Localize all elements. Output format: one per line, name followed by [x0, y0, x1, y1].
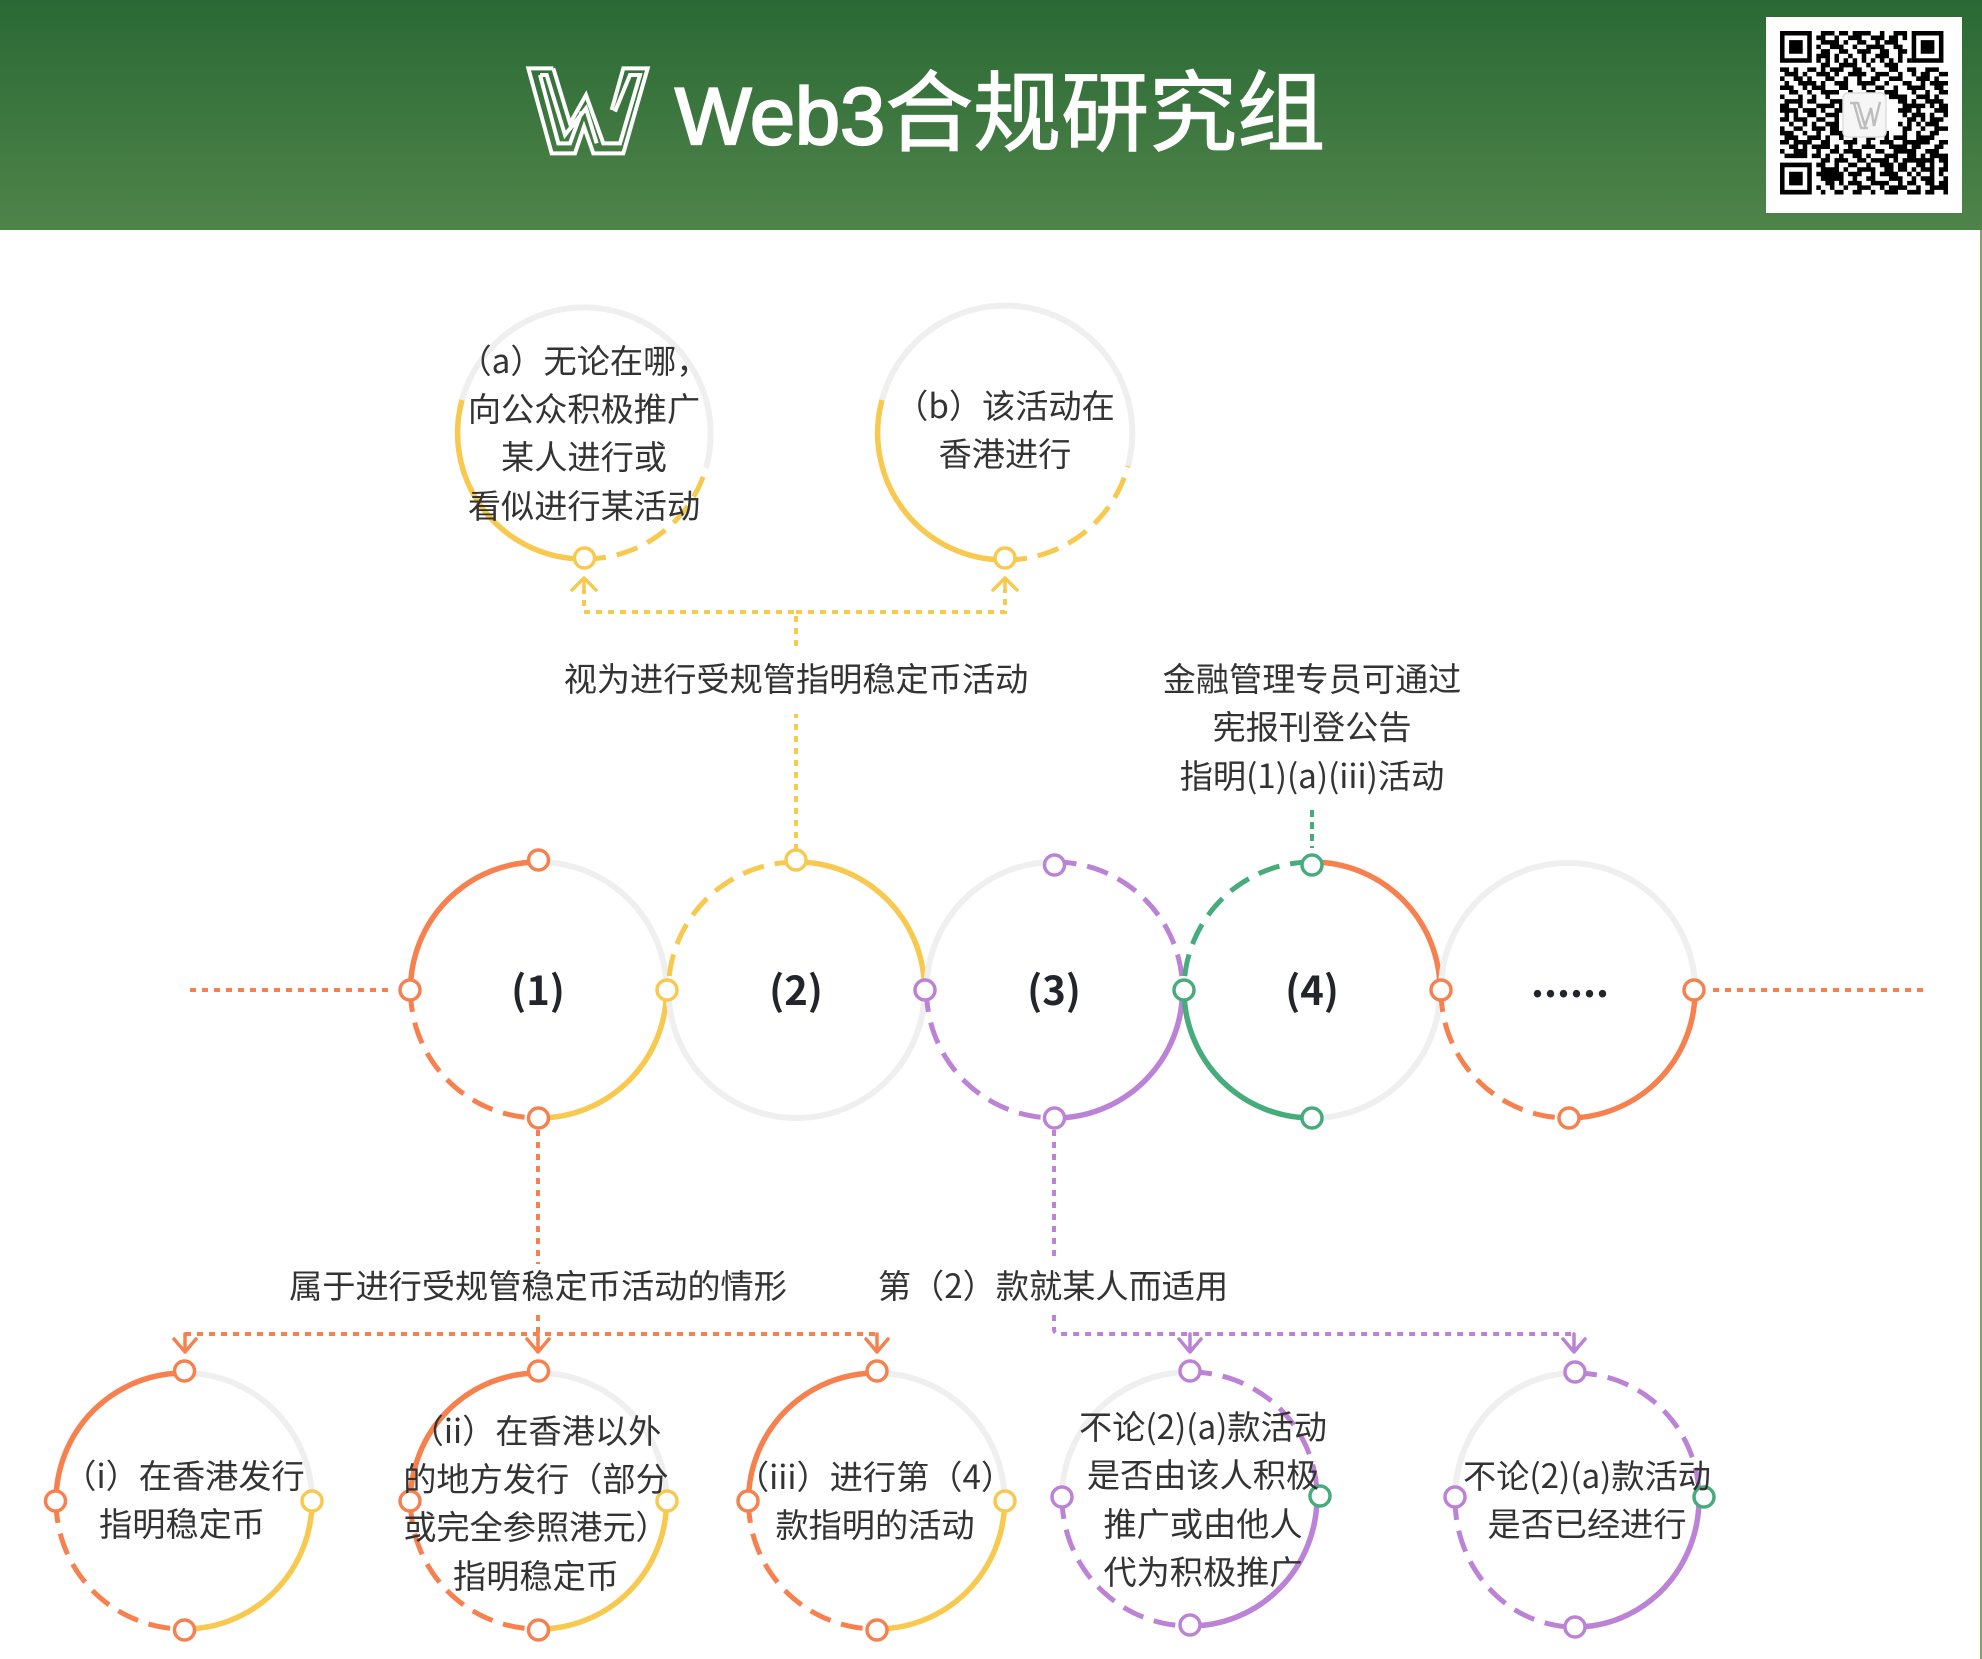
text: b: 香港进行: [939, 427, 1071, 476]
header banner: [0, 0, 1982, 230]
connector: green dashed: [1310, 810, 1314, 848]
connector: right dotted line: [1713, 988, 1929, 992]
icon: W logo: [528, 68, 648, 153]
bottom circle (iii): [736, 1361, 1015, 1640]
circle (3): (3): [1027, 959, 1081, 1017]
text: a: 向公众积极推广: [468, 382, 700, 431]
text: i: （i）在香港发行: [63, 1449, 305, 1498]
circle (5): [1441, 863, 1695, 1118]
bottom circle (v): [1445, 1362, 1714, 1637]
top circle (b): [878, 306, 1132, 568]
circle (4): (4): [1285, 959, 1339, 1017]
text: ii: 或完全参照港元）: [403, 1500, 669, 1549]
label: deemed activity: 视为进行受规管指明稳定币活动: [564, 652, 1028, 701]
QR code: [1766, 17, 1962, 213]
text: iv: 是否由该人积极: [1087, 1448, 1319, 1497]
circle (5): ......: [1531, 951, 1609, 1009]
bottom circle (ii): [400, 1361, 677, 1640]
circle (1): [410, 862, 666, 1118]
text: iv: 不论(2)(a)款活动: [1079, 1400, 1327, 1449]
circle (2): (2): [769, 959, 823, 1017]
text: ii: 的地方发行（部分: [403, 1452, 669, 1501]
connector: purple dotted down with arrows: [1054, 1130, 1585, 1352]
main circle row: [400, 850, 1704, 1128]
bottom circle (iv): [1052, 1361, 1330, 1635]
text: a: 看似进行某活动: [468, 479, 700, 528]
text: ii: （ii）在香港以外: [411, 1404, 661, 1453]
circle (4): [1184, 862, 1440, 1118]
text: iii: 款指明的活动: [775, 1498, 975, 1547]
title: Web3合规研究组: [675, 43, 1325, 170]
connector: yellow arrows to (a) and (b): [572, 578, 1017, 850]
text: a: 某人进行或: [501, 430, 667, 479]
text: i: 指明稳定币: [99, 1497, 265, 1546]
label: monetary authority notice: 宪报刊登公告: [1212, 700, 1412, 749]
label: monetary authority notice: 指明(1)(a)(iii)活动: [1180, 749, 1444, 798]
top circle (a): [458, 307, 711, 568]
label: regulated stablecoin activity: 属于进行受规管稳定币活动的情形: [289, 1259, 787, 1308]
text: b: （b）该活动在: [895, 379, 1115, 428]
text: iv: 代为积极推广: [1103, 1545, 1303, 1594]
header background: [0, 0, 1982, 230]
text: iii: （iii）进行第（4）: [736, 1450, 1014, 1499]
text: iv: 推广或由他人: [1103, 1497, 1303, 1546]
bottom circle (i): [46, 1361, 322, 1640]
label: section 2 applies: 第（2）款就某人而适用: [878, 1259, 1228, 1308]
circle (1): (1): [511, 959, 565, 1017]
text: a: （a）无论在哪，: [458, 334, 710, 383]
right edge strip: [1980, 230, 1982, 1659]
label: monetary authority notice: 金融管理专员可通过: [1163, 652, 1461, 701]
circle (2): [668, 862, 924, 1118]
text: v: 不论(2)(a)款活动: [1463, 1449, 1711, 1498]
connector: orange dotted down with arrows: [174, 1130, 888, 1352]
text: ii: 指明稳定币: [453, 1549, 619, 1598]
connector: left dotted line: [190, 988, 392, 992]
text: v: 是否已经进行: [1487, 1497, 1687, 1546]
main row nodes: [400, 850, 1704, 1128]
circle (3): [926, 862, 1182, 1118]
